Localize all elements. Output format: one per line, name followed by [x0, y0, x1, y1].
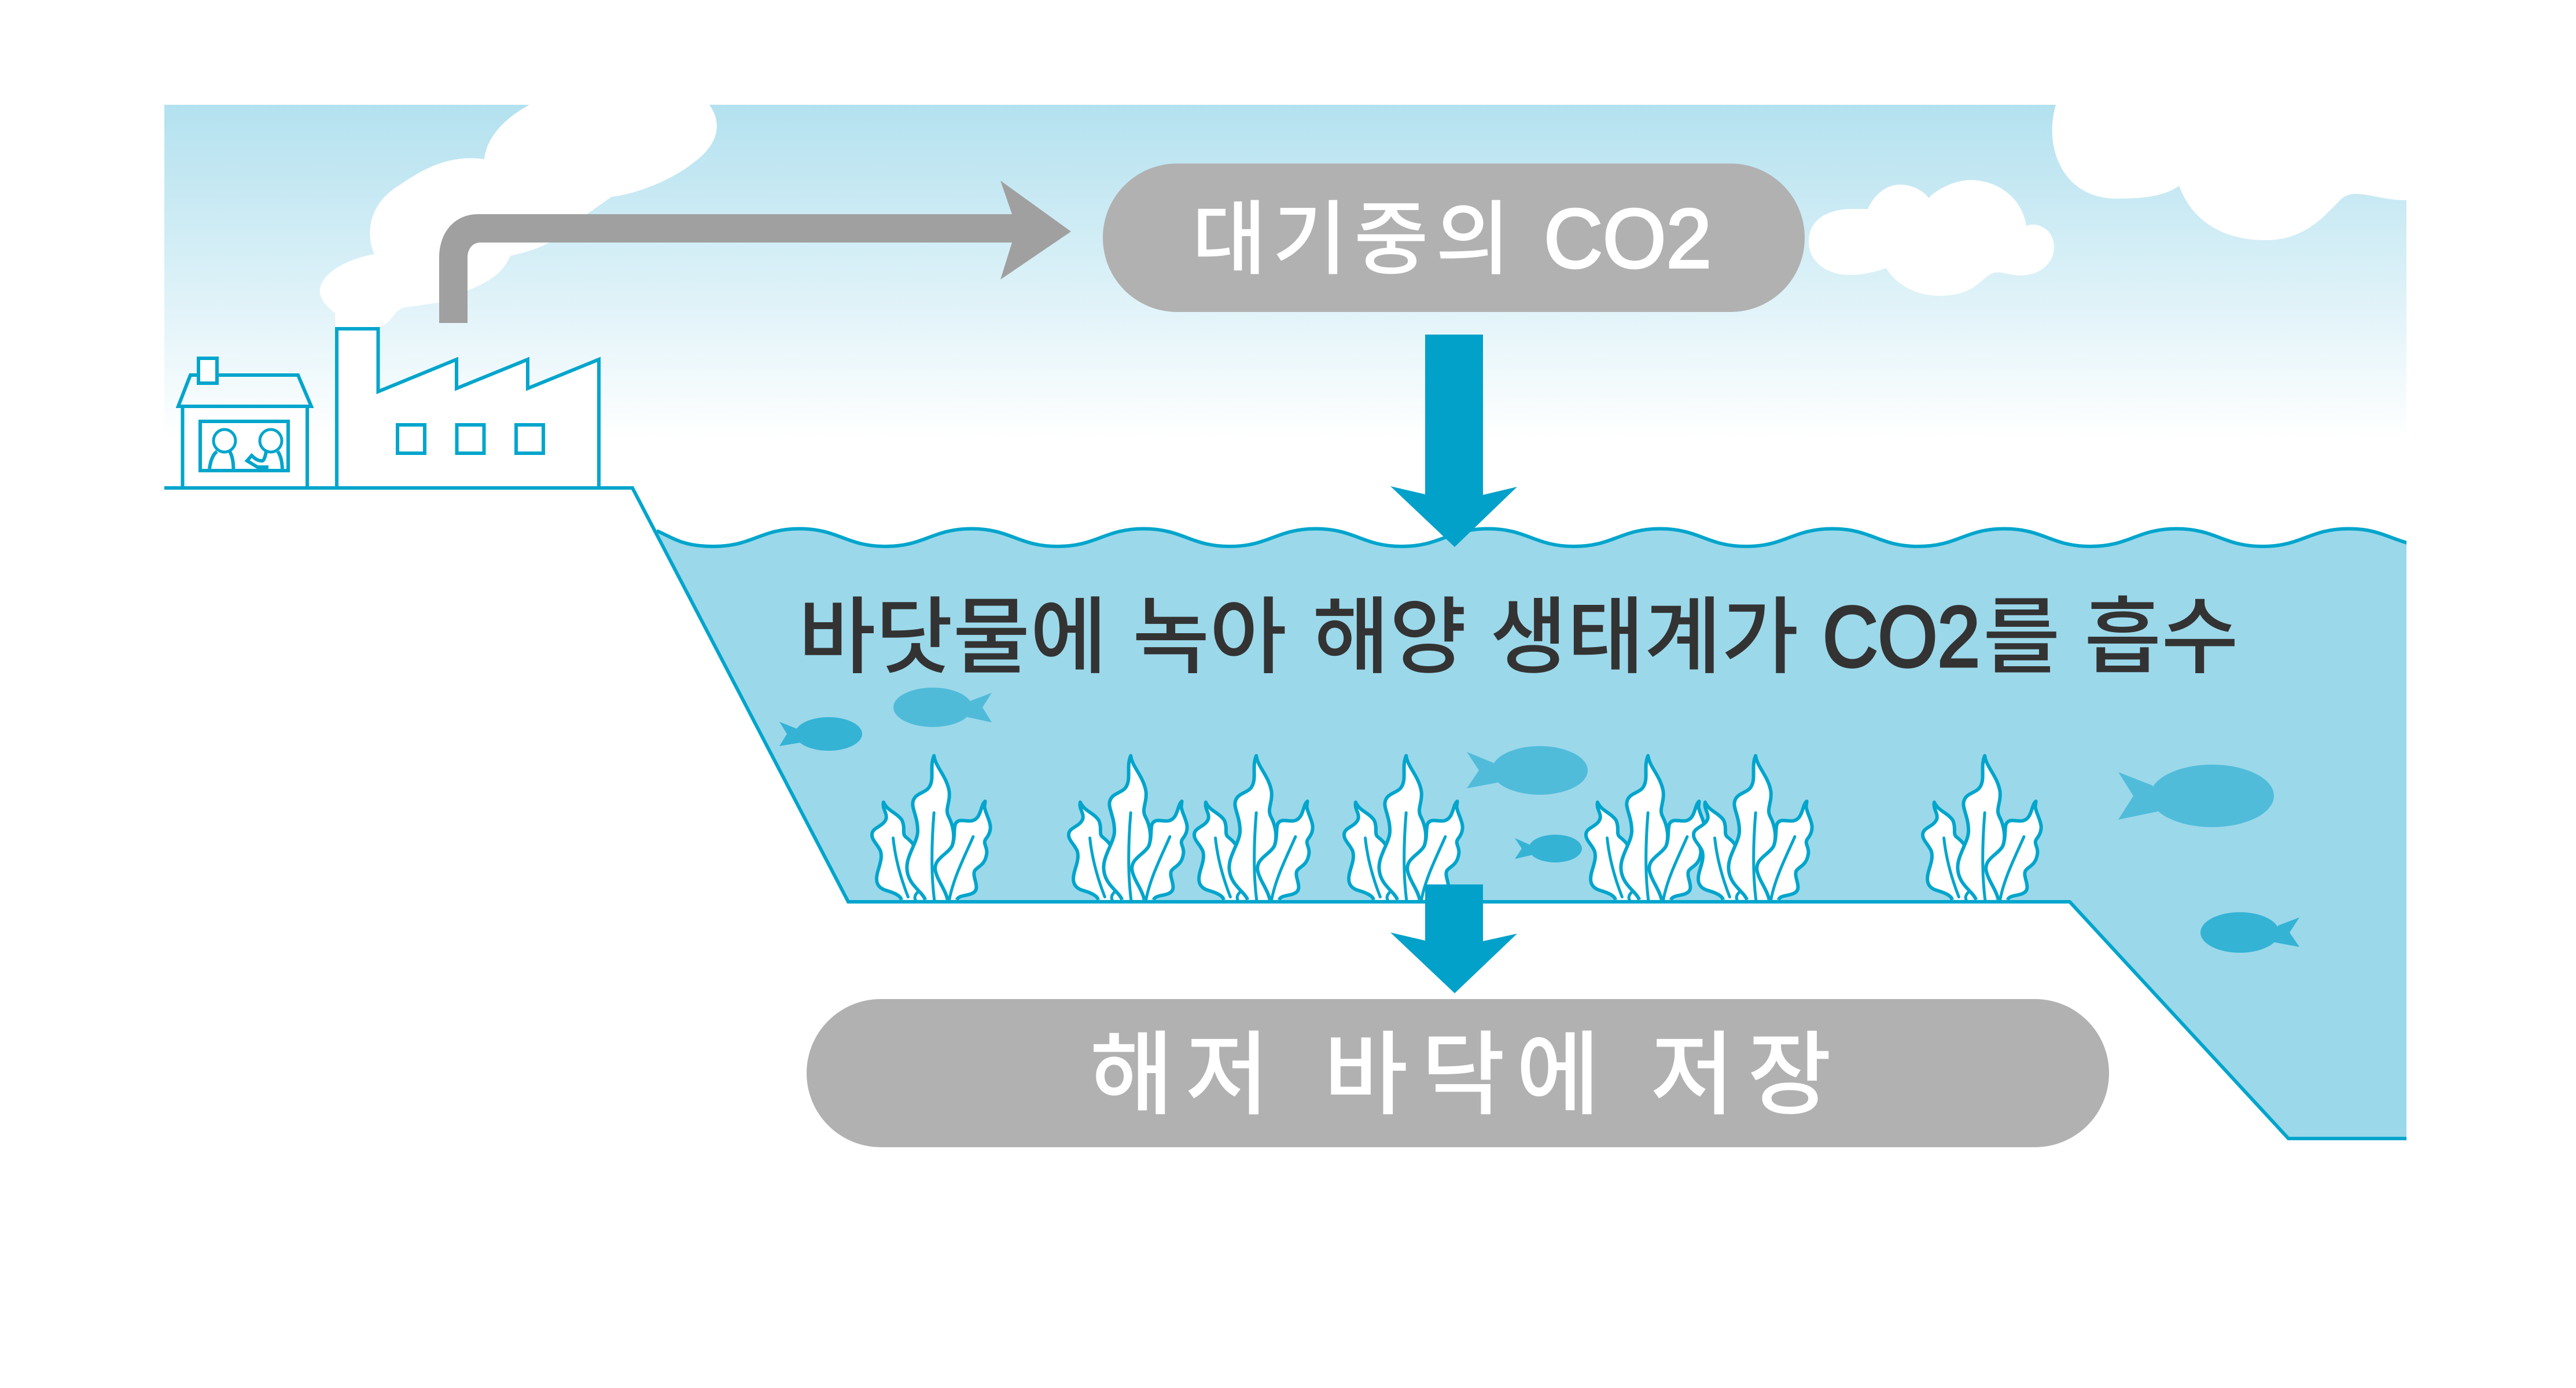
house [178, 358, 311, 488]
ocean caption: 생태계가 [1490, 569, 1799, 691]
fish: right large [2118, 765, 2274, 827]
ocean caption: 해양 [1312, 569, 1467, 691]
ocean caption: 바닷물에 [798, 569, 1107, 691]
sky background [164, 105, 2406, 490]
arrow: ocean to seabed [1390, 884, 1517, 993]
pill: seabed storage: 해저 바닥에 저장 [1090, 1001, 1831, 1133]
ocean caption: 를 [1983, 569, 2060, 691]
fish: centre large [1467, 746, 1588, 795]
pill: atmospheric CO2: 대기중의 [1192, 174, 1510, 291]
fish: centre small [1515, 835, 1582, 862]
cloud: top right [2052, 98, 2413, 240]
seaweed clumps [872, 756, 2041, 900]
coastline and seabed [164, 488, 2406, 1139]
fish: left small [779, 717, 862, 751]
ocean caption: 녹아 [1132, 569, 1287, 691]
arrow: atmosphere to ocean [1390, 335, 1517, 547]
illustration: carbon cycle [164, 105, 2406, 1147]
factory [337, 329, 599, 488]
pill: atmospheric CO2 [1103, 163, 1805, 312]
ocean water [657, 529, 2576, 1139]
fish: right small [2200, 912, 2299, 953]
cloud: factory smoke [320, 105, 717, 330]
wave surface line [657, 529, 2435, 546]
cloud: small [1809, 180, 2054, 296]
pill: seabed storage [807, 999, 2109, 1147]
ocean caption: CO2 [1823, 589, 1980, 685]
fish: left upper [893, 688, 992, 727]
ocean caption [798, 569, 2239, 691]
ocean caption: 흡수 [2084, 569, 2239, 691]
arrow: factory emissions to atmosphere [439, 181, 1071, 323]
pill: atmospheric CO2: CO2 [1544, 192, 1712, 285]
